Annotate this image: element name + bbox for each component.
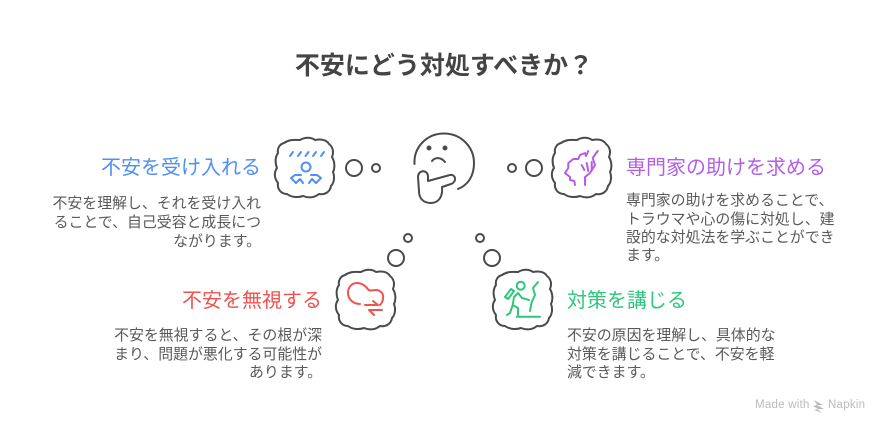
icon: meditating person in rain (290, 152, 324, 183)
description: ます。 (626, 247, 669, 264)
icon: cloud with arrows (348, 283, 383, 315)
thought bubbles: top right (508, 160, 542, 176)
description: 設的な対処法を学ぶことができ (626, 229, 834, 246)
attribution: Napkin (828, 399, 865, 411)
description: 対策を講じることで、不安を軽 (567, 346, 775, 363)
description (567, 327, 775, 381)
central thinking face (414, 134, 474, 203)
panel: take measures (493, 270, 775, 381)
panel: ignore anxiety (114, 270, 395, 381)
heading: 不安を無視する (182, 289, 322, 312)
thought bubbles: top left (346, 160, 380, 176)
description: 減できます。 (567, 364, 655, 381)
description: 不安の原因を理解し、具体的な (567, 327, 775, 344)
description: ることで、自己受容と成長につ (54, 214, 261, 231)
icon: napkin logo (813, 400, 824, 413)
heading: 対策を講じる (567, 289, 687, 312)
heading: 不安を受け入れる (101, 156, 261, 179)
cloud: accept (275, 138, 334, 197)
description: まり、問題が悪化する可能性が (114, 346, 322, 363)
description: 不安を無視すると、その根が深 (114, 327, 322, 344)
description: あります。 (249, 364, 322, 381)
cloud: ignore (336, 270, 395, 329)
description (114, 327, 322, 381)
thought bubbles: bottom left (388, 234, 412, 266)
attribution: Made with (755, 399, 810, 411)
description: ながります。 (173, 233, 261, 250)
description: トラウマや心の傷に対処し、建 (626, 211, 835, 228)
description (53, 195, 261, 250)
panel: accept anxiety (53, 138, 334, 250)
description: 不安を理解し、それを受け入れ (53, 195, 261, 212)
cloud: measures (493, 270, 552, 329)
thought bubbles: bottom right (476, 234, 500, 266)
icon: climber (505, 282, 540, 317)
cloud: help (552, 138, 611, 197)
description (626, 192, 835, 264)
panel: seek professional help (552, 138, 835, 264)
title: 不安にどう対処すべきか？ (295, 52, 593, 80)
heading: 専門家の助けを求める (626, 156, 826, 179)
description: 専門家の助けを求めることで、 (626, 192, 833, 209)
icon: head with supporting hand (565, 151, 598, 185)
attribution (755, 399, 865, 413)
